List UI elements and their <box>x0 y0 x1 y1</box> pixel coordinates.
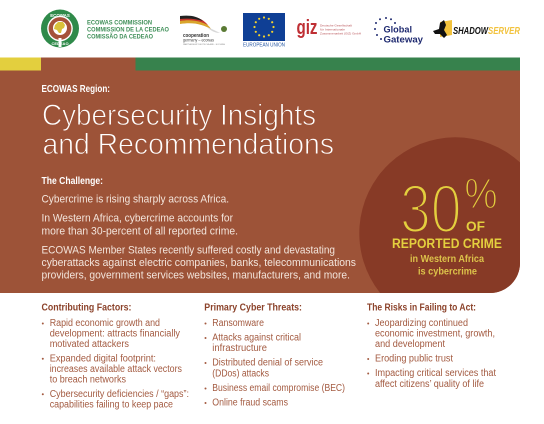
bullet list: factors: to breach networks <box>50 374 126 386</box>
panel: contributing factors <box>42 302 189 411</box>
bullet list: factors: Cybersecurity deficiencies / “gaps”: <box>50 389 189 400</box>
logo: Shadowserver: SHADOW <box>453 25 489 37</box>
panel: risks in failing to act <box>367 302 496 390</box>
panel: statistic circle <box>359 137 520 293</box>
paragraph: western africa share <box>42 213 238 238</box>
heading: contributing factors: Contributing Factors: <box>42 302 132 314</box>
bullet list: factors: development: attracts financially <box>50 328 180 340</box>
bullet list: risks: Impacting critical services that <box>375 368 496 379</box>
ECOWAS commission name <box>87 20 169 40</box>
bullet list: risks <box>367 318 496 390</box>
bullet list: threats: Online fraud scams <box>212 398 288 408</box>
percent sign: % <box>464 171 498 219</box>
bullet list: factors: motivated attackers <box>50 339 129 350</box>
label: in Western Africa is cybercrime: is cybercrime <box>418 267 477 278</box>
bullet list: factors: Rapid economic growth and <box>50 318 160 329</box>
bullet list: factors: capabilities failing to keep pace <box>50 400 173 411</box>
yellow accent bar <box>0 58 41 70</box>
title <box>42 99 334 161</box>
logo bar <box>41 10 520 48</box>
text block: the challenge <box>42 176 356 282</box>
bullet list: threats: infrastructure <box>212 343 267 354</box>
label: of: OF <box>466 219 485 234</box>
paragraph: western africa share: In Western Africa, cybercrime accounts for <box>42 213 233 225</box>
paragraph: member states attacks <box>42 244 356 282</box>
logo: Global Gateway: Gateway <box>384 34 424 46</box>
logo: giz: Zusammenarbeit (GIZ) GmbH <box>320 32 361 36</box>
logo: Shadowserver <box>433 20 520 38</box>
label: in Western Africa is cybercrime: in Western Africa <box>410 254 484 265</box>
paragraph: member states attacks: providers, government services websites, manufacturers, and more. <box>42 270 350 282</box>
heading: primary cyber threats: Primary Cyber Threats: <box>204 302 302 314</box>
panel: primary cyber threats <box>204 302 345 408</box>
bullet list: factors: Expanded digital footprint: <box>50 354 156 364</box>
eyebrow: ECOWAS Region: ECOWAS Region: <box>42 84 110 95</box>
heading: the challenge: The Challenge: <box>42 176 103 187</box>
bullet list: threats: Ransomware <box>212 318 264 329</box>
title: and Recommendations <box>42 128 334 161</box>
label: in Western Africa is cybercrime <box>410 254 484 278</box>
icon: ECOWAS emblem: ECOWAS <box>50 13 70 18</box>
bullet list: threats: (DDos) attacks <box>212 368 269 380</box>
bullet list: threats: Business email compromise (BEC) <box>212 383 345 394</box>
icon: ECOWAS emblem <box>41 10 79 48</box>
paragraph: member states attacks: cyberattacks against electric companies, banks, telecommunications <box>42 257 356 269</box>
bullet list: factors: increases available attack vectors <box>50 364 182 375</box>
logo: giz <box>296 17 361 39</box>
bullet list: risks: and development <box>375 339 445 350</box>
ECOWAS commission name: COMISSÃO DA CEDEAO <box>87 31 153 40</box>
logo: cooperation germany ecowas: germany – ecowas <box>183 38 215 42</box>
bullet list: risks: Jeopardizing continued <box>375 318 468 329</box>
logo: European Union flag <box>243 13 285 48</box>
bullet list: risks: economic investment, growth, <box>375 328 495 340</box>
bullet list: threats: Distributed denial of service <box>212 358 323 369</box>
bullet list: factors <box>42 318 189 411</box>
logo: giz: für Internationale <box>320 28 345 32</box>
ECOWAS commission name: ECOWAS COMMISSION <box>87 20 152 27</box>
logo: Shadowserver: SERVER <box>488 25 520 37</box>
logo: giz: Deutsche Gesellschaft <box>320 24 352 28</box>
logo: cooperation germany ecowas <box>180 16 227 46</box>
paragraph: member states attacks: ECOWAS Member States recently suffered costly and devastating <box>42 244 335 256</box>
label: reported crime: REPORTED CRIME <box>392 236 502 251</box>
logo: Global Gateway <box>374 17 424 46</box>
logo: giz: giz <box>296 17 318 39</box>
logo: cooperation germany ecowas: PARTNERSHIP DEUTSCHLAND - ECOWAS <box>183 43 226 46</box>
logo: European Union flag: EUROPEAN UNION <box>243 42 285 48</box>
panel: main background <box>0 58 520 293</box>
ECOWAS commission name: COMMISSION DE LA CEDEAO <box>87 27 169 34</box>
icon: ECOWAS emblem: CEDEAO <box>51 41 69 46</box>
heading: risks in failing to act: The Risks in Failing to Act: <box>367 302 476 314</box>
paragraph: western africa share: more than 30-percent of all reported crime. <box>42 226 238 238</box>
bullet list: threats <box>204 318 345 408</box>
bullet list: risks: Eroding public trust <box>375 354 453 364</box>
title: Cybersecurity Insights <box>42 99 316 132</box>
green accent bar <box>136 58 520 70</box>
big number 30: 30 <box>400 171 462 248</box>
logo: Global Gateway: Global <box>384 24 412 36</box>
bullet list: risks: affect citizens’ quality of life <box>375 379 484 390</box>
paragraph: rising cybercrime: Cybercrime is rising sharply across Africa. <box>42 194 229 206</box>
logo: cooperation germany ecowas: cooperation <box>183 33 209 39</box>
bullet list: threats: Attacks against critical <box>212 332 301 344</box>
